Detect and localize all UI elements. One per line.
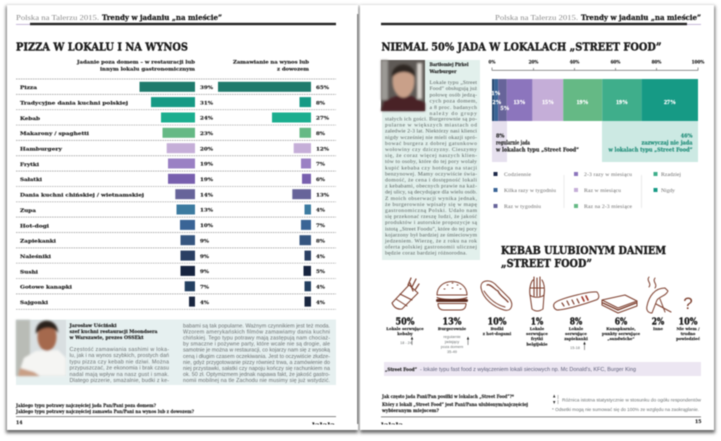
stat: hot dogs: z hot-dogami [483,331,512,336]
stat: don't know: powiedzieć [676,336,701,341]
row: Dania chinskie: Dania kuchni chińskiej / wietnamskiej [20,193,144,199]
left title: PIZZA W LOKALU I NA WYNOS [16,40,188,54]
expert text: pularne w większych miastach od [385,123,477,129]
column heading: takeaway [233,60,310,72]
callout: non-regular eaters: zazwyczaj nie jada [642,140,693,146]
callout: regular eaters: regularnie jada [496,140,531,146]
stat: other: 2% [652,316,664,327]
row: Zupa: 4% [316,208,326,214]
row: Kebab: 24% [200,116,214,122]
axis: percent scale: 0% [489,60,495,64]
row: Zupa: Zupa [20,208,36,214]
row: Nalesniki: 9% [200,254,210,260]
interview text column 2: ok. 50 zł. Optymizmem jednak napawa fakt, że jakość gastro- [183,372,330,378]
definition band: „Street Food” [385,367,417,373]
stacked bar: frequency: 15% [542,100,554,106]
stat: zapiekanki: serwujące [565,331,587,336]
row: Gotowe kanapki: 4% [316,284,326,290]
row: Salatki: Sałatki [20,177,42,183]
row: Pizza [20,82,330,92]
interview text column 2: ceną i długim czasem oczekiwania. Jest to oczywiście złudze- [183,354,330,360]
expert text: należy do grupy [430,111,477,117]
interview text column 2: nomii mobilnej na tle Zachodu nie musimy się już wstydzić. [183,378,330,384]
footer right [381,416,701,428]
significance note: Różnica istotna statystycznie w stosunku do ogółu respondentów [562,398,702,402]
stat: burgers: jadający [444,339,459,344]
row: Tradycyjne: 8% [316,100,326,106]
stat: fries: serwujące [526,331,548,336]
row: Kebab: 27% [316,116,330,122]
stat: burgers: 35-49 [447,349,457,354]
stats row [386,316,701,354]
stat: kebab: 18 - 24 [400,341,412,345]
row: Frytki: 19% [200,162,214,168]
stat: sandwiches: punkty serwujące [602,331,641,336]
column heading: takeaway: Zamawianie na wynos lub [233,60,310,66]
interview text column 2: nie, gdyż przygotowanie pizzy również trwa, a zamówienie do [183,360,330,366]
footer left: lalala [312,422,335,428]
interview text column 1: przypuszczać, że ekonomia i brak czasu [70,366,169,372]
row: Hot-dogi: 10% [200,223,214,229]
left running header: Polska na Talerzu 2015. [16,13,99,22]
row: Salatki: 6% [316,177,326,183]
row: Hamburgery: Hamburgery [20,147,62,153]
stacked bar: frequency: 13% [514,100,526,106]
stat: burgers [438,316,469,354]
stat: fries: frytki [531,336,543,341]
photo: chef [16,320,66,376]
row: Gotowe kanapki: 7% [200,284,210,290]
row: Pizza: Pizza [20,85,37,91]
expert text: się przekonać rzeszę ludzi, że jakość [385,214,477,220]
stat: don't know: Nie wiem / [676,326,700,331]
interview byline: w Warszawie, prezes OSSEkt [68,335,144,341]
stat: zapiekanki: zapiekanki [564,336,588,341]
stat: hot dogs: Budki [490,326,504,331]
icon: hot dog [481,281,512,310]
stat: burgers: poza domem [441,344,463,349]
row: Salatki [20,174,326,184]
icon: other dish [647,277,671,313]
legend: Nigdy [661,188,675,194]
expert text: Food” obsługują już [430,86,477,92]
interview text column 2: by smaczne i pożywne party, które wcale nie są drogie, ale [183,342,330,348]
row: Dania chinskie: 13% [316,192,330,198]
footer right: lalala [381,422,403,428]
expert text: kojarzony był bardziej ze śmieciowym [385,232,478,238]
expert text: oferta polskiej gastronomii ulicznej [385,244,477,251]
stacked bar: frequency: 19% [616,100,628,106]
definition band: - lokale typu fast food z wyłączeniem lokali sieciowych np. Mc Donald's, KFC, Burger King [420,367,636,373]
interview text column 1 [70,347,169,384]
row: Tradycyjne [20,97,326,107]
stat: kebab: Lokale serwujące [386,326,424,331]
expert name [429,62,469,75]
legend: Kilka razy w tygodniu [504,188,556,194]
footer left [16,416,336,428]
row: Zapiekanki: 8% [316,238,326,244]
row: Nalesniki [20,251,326,261]
icon: sandwich [602,295,637,313]
row: Frytki: Frytki [20,162,39,168]
row: Pizza: 39% [200,85,214,91]
row: Hamburgery [20,143,330,153]
interview text column 2 [183,323,330,384]
expert text: a 8 proc. badanych [430,105,477,111]
significance note: * Odsetki mogą nie sumować się do 100% ze względu na zaokrąglanie. [552,407,699,412]
axis: percent scale: 60% [611,60,620,64]
interview text column 1: nadal mają wpływ na nasz gust i smak. [70,372,169,378]
expert text: cych poza domem, [430,99,478,105]
expert text: bować burgera z dobrej gatunkowo [385,141,477,147]
interview text column 1: lu, jak i na wynos szybkich, prostych dań [70,353,169,359]
icon: zapiekanka [554,292,599,310]
callout: non-regular eaters: w lokalach typu „Street Food” [608,148,693,154]
definition band [384,362,701,376]
interview text column 2: samotnie je można w restauracji, co kojarzy nam się z wysoką [183,348,330,354]
survey questions right [381,394,528,414]
left running header: Trendy w jadaniu „na mieście” [102,13,222,22]
stat: hot dogs [483,316,512,336]
row dividers [16,79,336,309]
row: Salatki: 19% [200,177,214,183]
row: Kebab: Kebab [20,116,41,122]
bar chart: dishes [20,82,330,307]
callout: regular eaters: 8% [496,134,505,140]
row: Nalesniki: Naleśniki [20,254,51,260]
stacked bar: frequency: 27% [664,100,676,106]
row: Zapiekanki: 9% [200,238,210,244]
stat: other: Inne [653,326,664,331]
survey questions left: Jakiego typu potrawy najczęściej zamawia Pan/Pani na wynos lub z dowozem? [15,409,194,415]
interview text column 2: chińskiej. Tego typu potrawy mają zastępują nam chociaż- [183,336,330,342]
callout: regular eaters [492,121,579,162]
stat: don't know: trudno [681,331,696,336]
legend [494,172,681,210]
stacked bar: frequency: 19% [576,100,588,106]
callout: non-regular eaters: 46% [681,134,693,140]
icon: burger [437,282,467,310]
stat: sandwiches: 6% [615,316,627,327]
stat: zapiekanki: 15-18 [570,346,580,350]
expert text: wołowiny czy dziczyzny. Cieszymy [385,147,477,153]
callout: non-regular eaters [602,121,698,162]
axis: percent scale: 40% [570,60,579,64]
left page [7,5,358,430]
row: Tradycyjne: 31% [200,100,214,106]
expert text: że burgerownie wpisały się w mapę [385,202,477,208]
stat: fries [526,316,548,346]
expert text: istotą „Street Foodu”, które do tej pory [385,226,477,232]
column heading: takeaway: z dowozem [277,66,309,72]
stat: hot dogs: 10% [488,316,506,327]
row: Makarony: 8% [316,131,326,137]
row: Zupa [20,204,326,214]
panel: expert sidebar [381,60,480,260]
kebab title: KEBAB ULUBIONYM DANIEM [501,243,666,257]
row: Frytki [20,158,326,168]
legend: Codziennie [504,172,531,178]
row: Sajgonki: 4% [200,300,210,306]
expert text [384,80,478,257]
right running header: Trendy w jadaniu „na mieście” [581,13,701,22]
row: Makarony: 23% [200,131,214,137]
legend: Raz na 2-3 miesiące [584,204,632,210]
stat: fries: Lokale [530,326,545,331]
interview text column 1: Częstość zamawiania sashimi w loka- [70,347,169,353]
stat: don't know: 10% [678,316,698,327]
stat: sandwiches [602,316,641,341]
stat: zapiekanki: Lokale [569,326,584,331]
row: Hot-dogi: 7% [316,223,326,229]
stat: fries: belgijskie [526,341,548,346]
legend: Raz w miesiącu [584,188,621,194]
expert text: domość, że cena i dostępność lokali [385,178,477,184]
survey questions right: wybieranym miejscem? [381,408,439,414]
legend: Rzadziej [661,172,681,178]
kebab title: „STREET FOOD” [501,256,592,270]
expert text: kupić kebaba czy hotdoga na stacji [385,165,477,171]
interview text column 1: Dlatego pizzerie, smażalnie, budki z ke- [70,378,169,384]
row: Makarony: Makarony / spaghetti [20,131,89,137]
column heading: dining out: innym lokalu gastronomicznym [100,66,195,72]
right title: NIEMAL 50% JADA W LOKALACH „STREET FOOD” [382,40,662,54]
footer right: 15 [695,419,701,425]
row: Zapiekanki: Zapiekanki [20,239,56,245]
footer left: 14 [16,420,23,426]
interview text column 2: niej przystawki, sałatki czy napoju kończy się rachunkiem na [183,366,330,372]
row: Sajgonki [20,297,326,307]
axis: percent scale [489,60,704,70]
expert text: Lokale typu „Street [430,80,477,86]
left running header [16,13,336,25]
row: Dania chinskie: 14% [200,192,214,198]
row: Sajgonki: Sajgonki [20,300,48,306]
row: Hamburgery: 12% [316,146,330,152]
expert text: połowę osób jedzą- [430,92,477,98]
right running header: Polska na Talerzu 2015. [495,13,578,22]
photo: expert [381,60,425,111]
stat: fries: 1% [531,316,543,327]
expert text: z kebabami, obecnych prawie na każ- [385,184,477,190]
row: Zupa: 13% [200,208,214,214]
stacked bar: frequency: 2% [492,100,502,106]
expert text: Z moich obserwacji wynika jednak, [385,196,478,202]
survey questions right: Który z lokali „Street Food” jest Pani/Pana ulubionym/najczęściej [382,401,528,408]
expert text: gastronomiczną Polski. Udało nam [385,208,478,214]
expert text: nigdy wcześniej nie mieli okazji spró- [385,135,477,141]
significance note [552,394,702,412]
row: Frytki: 7% [316,162,326,168]
expert text: tów to osoby, które do tej pory wolały [385,159,477,165]
row: Hot-dogi [20,220,326,230]
expert text: jedzeniem. Wierzę, że z roku na rok [384,238,477,244]
stat: burgers: regularnie [443,334,461,339]
interview byline [68,323,158,341]
right page [360,5,714,430]
right running header [381,13,701,25]
interview text column 1: typu pizza czy kebab nie dziwi. Można [70,359,169,365]
row: Sushi: Sushi [20,269,38,275]
row: Nalesniki: 4% [316,254,326,260]
row: Sushi: 9% [200,269,210,275]
stat: kebab: 50% [396,316,414,327]
stat: burgers: 13% [442,316,462,327]
stat: don't know [676,316,701,341]
row: Pizza: 65% [316,85,330,91]
row: Tradycyjne: Tradycyjne dania kuchni polskiej [20,100,128,106]
kebab title [501,243,666,270]
expert text: produktów i autorskie propozycje są [385,220,477,226]
row: Hot-dogi: Hot-dogi [20,223,49,229]
row: Sajgonki: 4% [316,300,326,306]
survey questions left: Jakiego typu potrawy najczęściej jada Pan/Pani poza domem? [15,403,156,409]
row: Sushi [20,266,326,276]
callout: regular eaters: w lokalach typu „Street Food” [495,148,579,154]
stat: sandwiches: „sandwiche” [607,336,635,341]
stat: kebab: kebaby [397,331,413,336]
stat: burgers: Burgerownie [438,326,467,331]
axis: percent scale: 20% [529,60,538,64]
expert name: Warburger [429,69,457,75]
column heading: dining out: Jadanie poza domem – w restauracji lub [76,60,196,66]
icon: fries [530,277,544,311]
expert text: dej ulicy, są decydujące dla wielu osób. [385,190,478,196]
legend: Raz w tygodniu [504,204,541,210]
expert text: zaledwie 2-3 lat. Niektórzy nasi klienci [385,129,477,135]
row: Gotowe kanapki: Gotowe kanapki [20,285,72,291]
expert name: Bartłomiej Pirkel [430,62,469,68]
icon: question mark: ? [683,294,693,313]
axis: percent scale: 80% [652,60,661,64]
column heading: dining out [76,60,196,72]
legend: 2-3 razy w miesiącu [584,172,632,178]
stacked bar: frequency: 5% [500,106,510,112]
interview text column 2: babami są tak popularne. Ważnym czynnikiem jest też moda. [183,323,330,329]
interview byline: Jarosław Uściński [68,323,117,329]
row: Gotowe kanapki [20,281,326,291]
panel: chef interview [16,320,336,385]
row: Makarony [20,128,326,138]
survey questions left [15,403,194,415]
expert text: stałych ich gości. Burgerownie są po- [385,116,477,122]
stat: sandwiches: Kanapkarnie, [606,326,636,331]
stat: other [652,316,664,331]
interview text column 2: Wzorem amerykańskich filmów zamawiamy dania kuchni [183,329,330,335]
survey questions right: Jak często jada Pani/Pan posiłki w lokalach „Street Food”?* [381,394,515,400]
row: Dania chinskie [20,189,330,199]
expert text: się, że coraz więcej naszych klien- [385,153,477,159]
stat: kebab [386,316,424,345]
expert text: będzie coraz bardziej różnorodna. [385,251,468,257]
row: Sushi: 5% [316,269,326,275]
stacked bar: frequency [492,79,698,121]
interview byline: szef kuchni restauracji Moondsera [70,329,158,335]
stacked bar: frequency: 1% [492,91,500,97]
icon: kebab wrap [392,278,419,309]
row: Zapiekanki [20,235,326,245]
row: Kebab [20,112,330,122]
stat: zapiekanki: 8% [570,316,582,327]
axis: percent scale: 100% [692,60,704,64]
expert text: benzynowej. Mamy oczywiście świa- [385,171,477,177]
row: Hamburgery: 20% [200,146,214,152]
stat: zapiekanki [564,316,588,350]
